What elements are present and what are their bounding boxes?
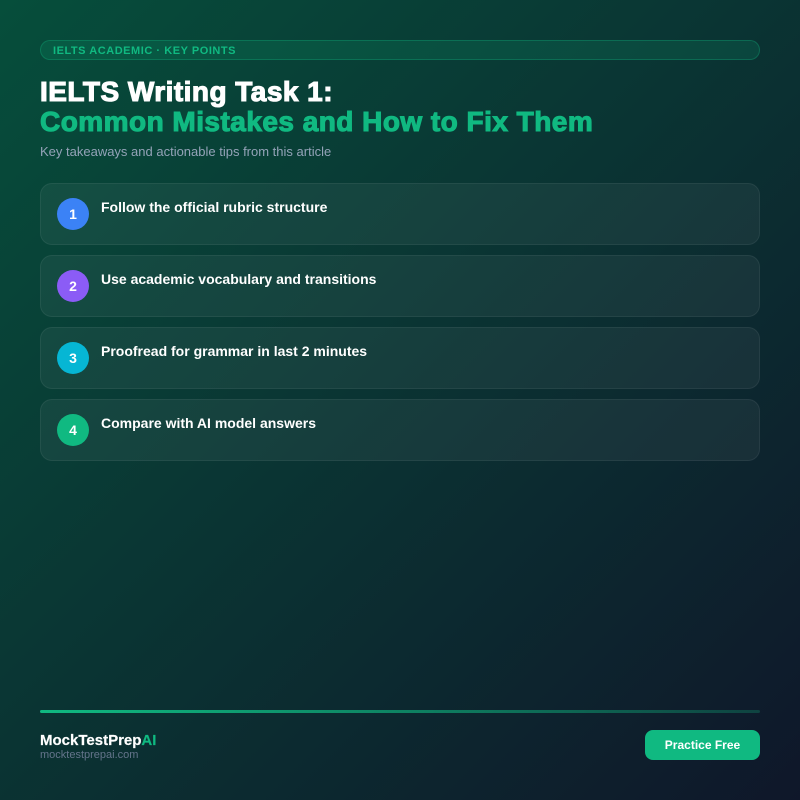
number badge 3: [57, 342, 89, 374]
key point 1: [40, 183, 760, 245]
call to action button: Practice Free: [665, 738, 740, 752]
number badge 2: 2: [69, 278, 77, 294]
number badge 4: [57, 414, 89, 446]
number badge 2: [57, 270, 89, 302]
key point 2: [40, 255, 760, 317]
point text 2: Use academic vocabulary and transitions: [101, 271, 376, 287]
number badge 1: [57, 198, 89, 230]
title: IELTS Writing Task 1:: [40, 76, 333, 107]
point text 3: Proofread for grammar in last 2 minutes: [101, 343, 367, 359]
point text 4: Compare with AI model answers: [101, 415, 316, 431]
number badge 4: 4: [69, 422, 77, 438]
key point 4: [40, 399, 760, 461]
key point 3: [40, 327, 760, 389]
category badge: [40, 40, 760, 60]
number badge 3: 3: [69, 350, 77, 366]
point text 1: Follow the official rubric structure: [101, 199, 327, 215]
category badge: IELTS ACADEMIC · KEY POINTS: [53, 45, 236, 57]
brand url: mocktestprepai.com: [40, 749, 138, 761]
footer gradient rule: [40, 710, 760, 713]
number badge 1: 1: [69, 206, 77, 222]
subtitle: Key takeaways and actionable tips from this article: [40, 144, 331, 159]
brand name: MockTestPrepAI: [40, 732, 156, 749]
title: Common Mistakes and How to Fix Them: [40, 106, 593, 137]
call to action button: [645, 730, 760, 760]
title: [40, 76, 593, 137]
